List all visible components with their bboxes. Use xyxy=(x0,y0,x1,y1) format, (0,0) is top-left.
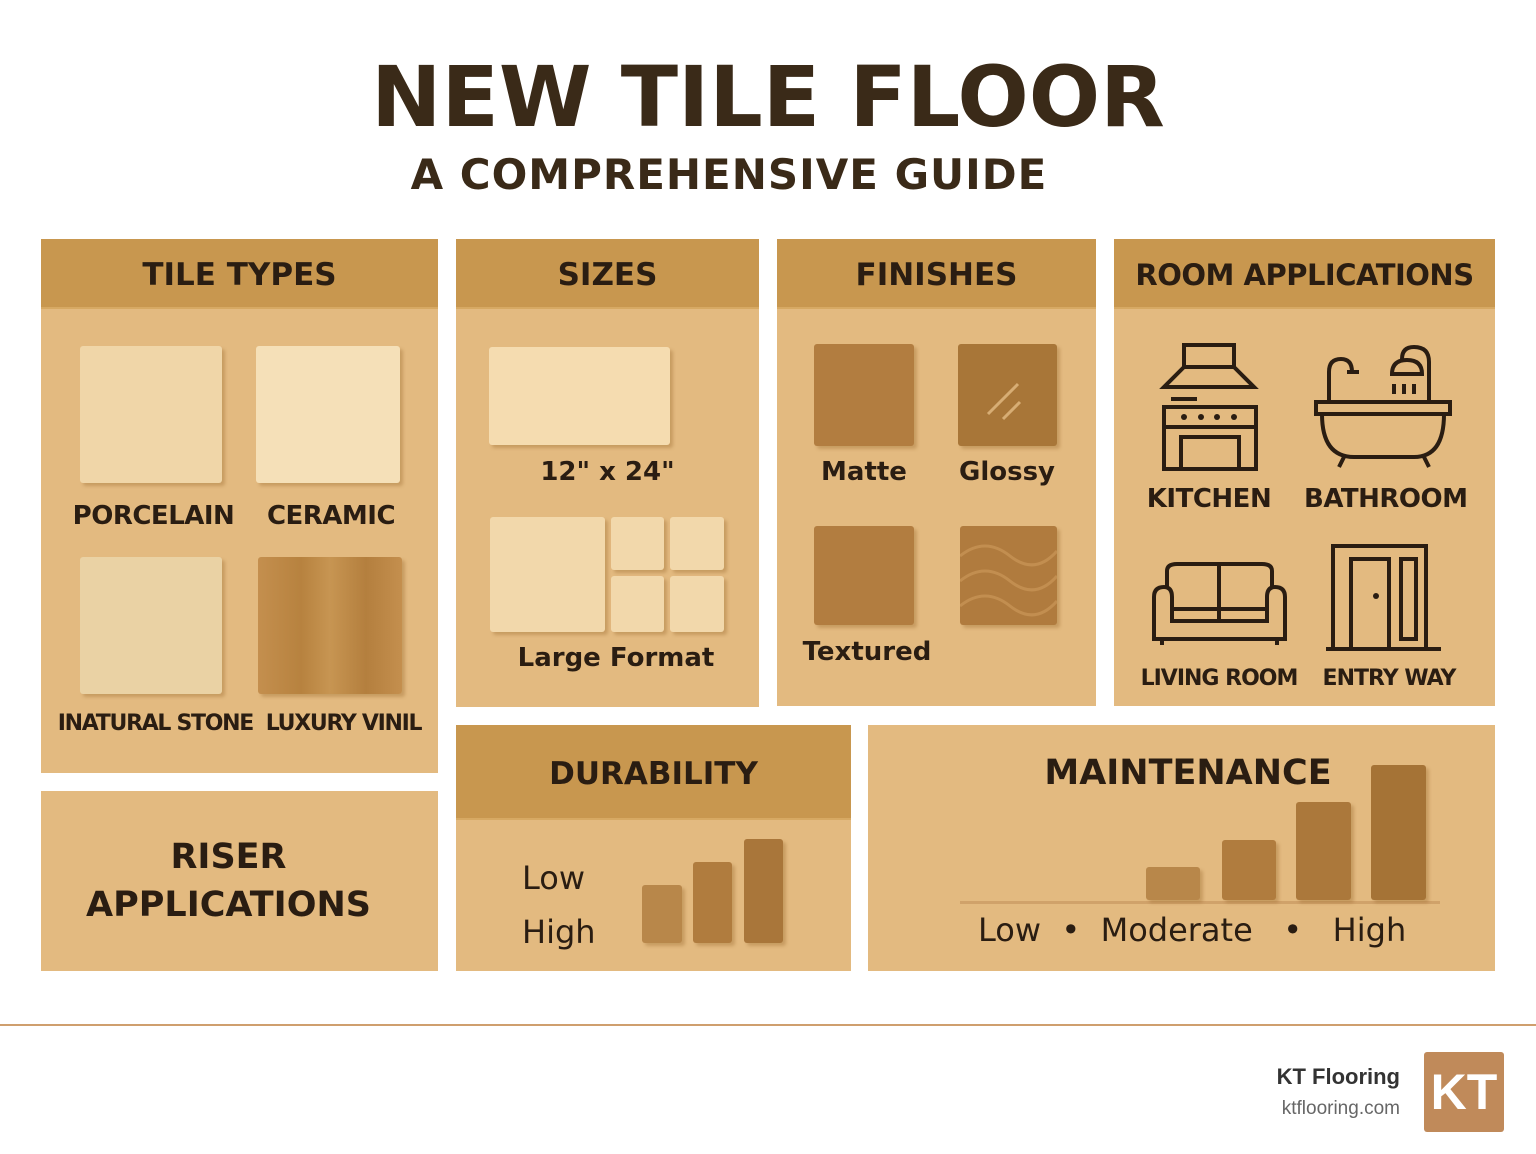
panel: riser applications xyxy=(41,791,438,971)
heading: riser applications: RISER xyxy=(170,837,287,877)
label low: Low xyxy=(522,859,585,897)
tile ceramic xyxy=(256,346,400,483)
label kitchen: KITCHEN xyxy=(1147,484,1271,514)
panel: durability xyxy=(456,725,851,971)
panel: room applications xyxy=(1114,239,1495,706)
bar chart maintenance xyxy=(960,765,1440,904)
heading: finishes xyxy=(777,239,1096,309)
label 12x24: 12" x 24" xyxy=(540,457,675,487)
label entry way: ENTRY WAY xyxy=(1323,666,1455,691)
brand text: ktflooring.com xyxy=(1282,1098,1400,1119)
tile glossy xyxy=(958,344,1057,446)
panel: tile types xyxy=(41,239,438,773)
brand text: KT Flooring xyxy=(1277,1064,1400,1089)
panel: maintenance xyxy=(868,725,1495,971)
tile wave xyxy=(960,526,1057,625)
heading: maintenance: MAINTENANCE xyxy=(1044,753,1332,793)
heading: room applications xyxy=(1114,239,1495,309)
label high: High xyxy=(522,913,596,951)
tile 12x24 xyxy=(489,347,670,445)
bar chart durability xyxy=(642,839,787,947)
heading: tile types: TILE TYPES xyxy=(142,257,337,293)
heading: durability: DURABILITY xyxy=(549,756,758,792)
heading: room applications: ROOM APPLICATIONS xyxy=(1135,258,1474,292)
icon: entry way xyxy=(1326,544,1441,651)
logo xyxy=(1424,1052,1504,1132)
label glossy: Glossy xyxy=(959,457,1055,487)
panel: sizes xyxy=(456,239,759,707)
subtitle: A COMPREHENSIVE GUIDE xyxy=(411,150,1047,199)
scale labels: Low • Moderate • High xyxy=(978,911,1406,949)
label bathroom: BATHROOM xyxy=(1304,484,1468,514)
label porcelain: PORCELAIN xyxy=(73,501,234,531)
icon: living room xyxy=(1152,562,1287,645)
label textured: Textured xyxy=(803,637,931,667)
brand text xyxy=(1277,1064,1400,1119)
title: NEW TILE FLOOR xyxy=(371,48,1165,146)
tile matte xyxy=(814,344,914,446)
heading: sizes xyxy=(456,239,759,309)
icon: bathroom xyxy=(1314,345,1452,468)
heading: durability xyxy=(456,725,851,820)
tile natural stone xyxy=(80,557,222,694)
label living room: LIVING ROOM xyxy=(1141,666,1297,691)
large format tiles xyxy=(490,517,728,636)
icon: kitchen xyxy=(1159,343,1259,471)
heading: riser applications: APPLICATIONS xyxy=(86,885,371,925)
label large format: Large Format xyxy=(518,643,714,673)
heading: finishes: FINISHES xyxy=(856,257,1017,293)
tile luxury vinyl xyxy=(258,557,402,694)
tile porcelain xyxy=(80,346,222,483)
heading: sizes: SIZES xyxy=(558,257,657,293)
footer line xyxy=(0,1024,1536,1026)
panel: finishes xyxy=(777,239,1096,706)
logo: KT xyxy=(1431,1064,1497,1120)
heading: tile types xyxy=(41,239,438,309)
labels stone vinyl: INATURAL STONE LUXURY VINIL xyxy=(58,711,421,736)
label matte: Matte xyxy=(821,457,907,487)
heading: riser applications xyxy=(86,837,371,925)
label ceramic: CERAMIC xyxy=(267,501,395,531)
tile textured xyxy=(814,526,914,625)
